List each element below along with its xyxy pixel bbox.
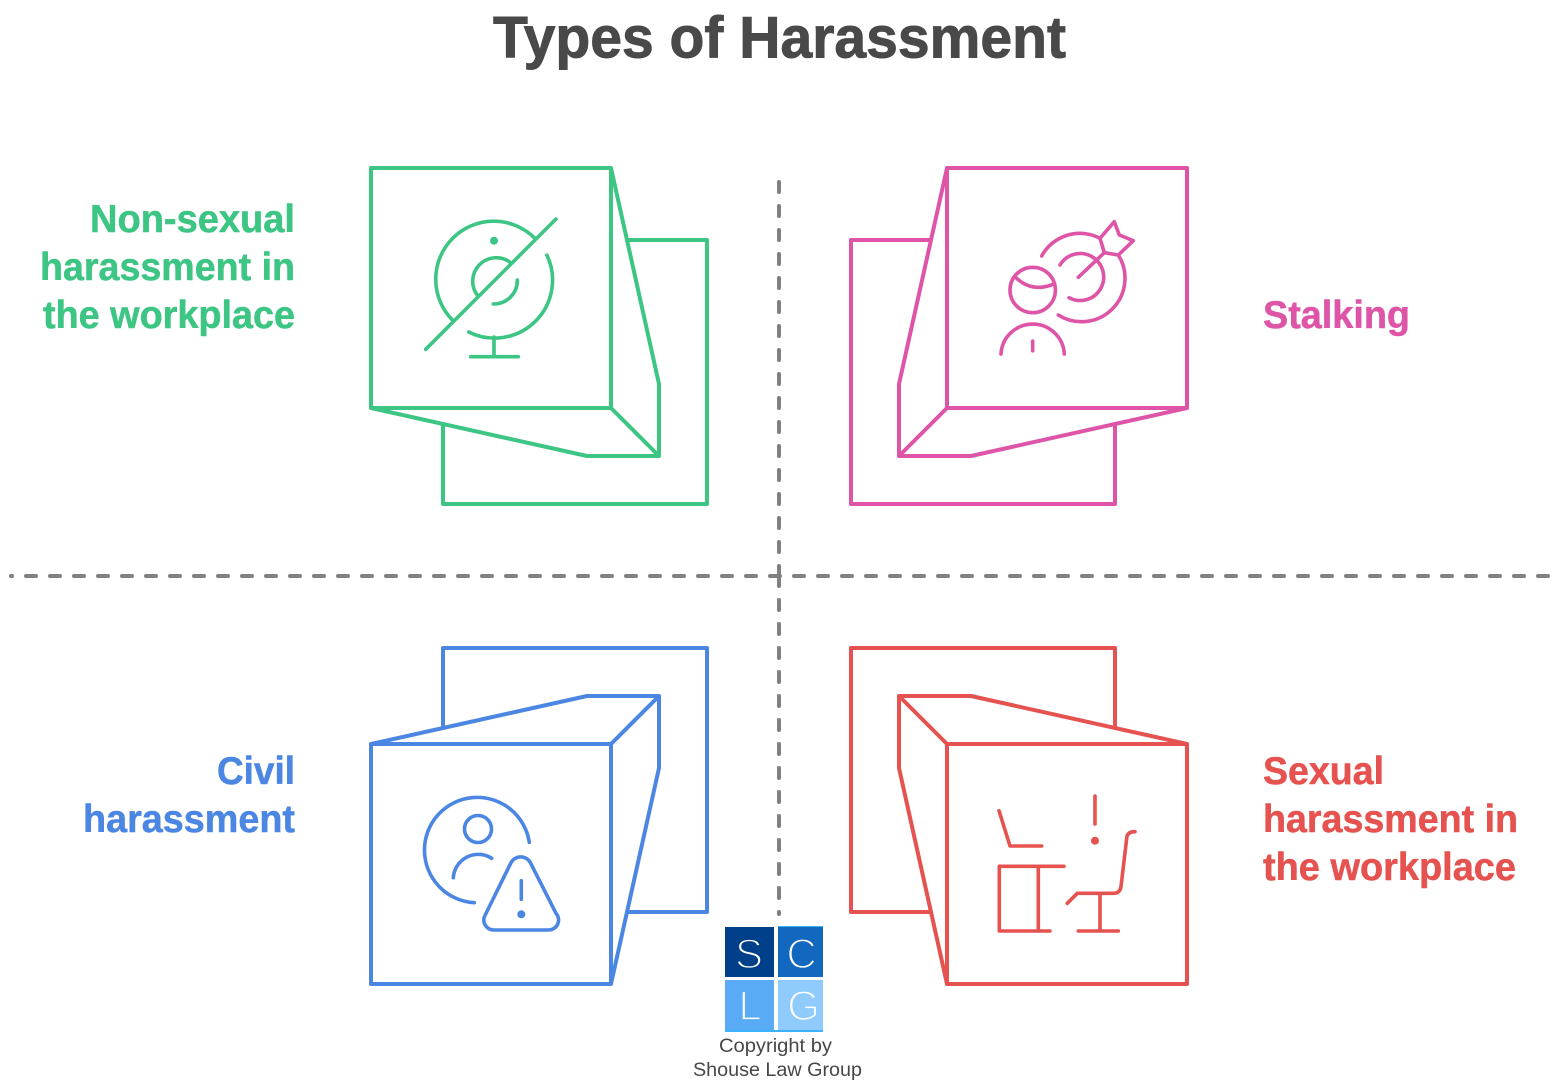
front cube — [371, 168, 659, 456]
logo: SCLG: L — [738, 982, 762, 1029]
label: non-sexual harassment in the workplace: the workplace — [43, 294, 295, 337]
logo: SCLG: G — [787, 982, 820, 1029]
copyright caption: Shouse Law Group — [693, 1059, 862, 1081]
back square — [443, 648, 707, 912]
panel: non-sexual harassment in the workplace — [371, 168, 707, 504]
label: sexual harassment in the workplace: harassment in — [1263, 798, 1518, 841]
title: Types of Harassment — [493, 6, 1066, 70]
front cube — [899, 696, 1187, 984]
back square — [443, 240, 707, 504]
label: stalking: Stalking — [1263, 294, 1410, 337]
logo: SCLG: C — [786, 930, 817, 977]
back square — [851, 240, 1115, 504]
logo: SCLG — [725, 926, 823, 1032]
label: non-sexual harassment in the workplace: harassment in — [40, 246, 295, 289]
icon: office desk and chair with alert — [999, 796, 1135, 931]
label: non-sexual harassment in the workplace — [40, 198, 295, 337]
logo: SCLG: S — [735, 930, 763, 977]
label: sexual harassment in the workplace — [1263, 750, 1518, 889]
vertical quadrant divider — [777, 182, 781, 914]
panel: stalking — [851, 168, 1187, 504]
panel: sexual harassment in the workplace — [851, 648, 1187, 984]
copyright caption — [693, 1035, 862, 1081]
label: civil harassment: harassment — [83, 798, 295, 841]
horizontal quadrant divider — [11, 574, 1550, 578]
panel: civil harassment — [371, 648, 707, 984]
label: sexual harassment in the workplace: Sexual — [1263, 750, 1384, 793]
label: sexual harassment in the workplace: the workplace — [1263, 846, 1516, 889]
icon: person targeted — [1001, 222, 1133, 354]
copyright caption: Copyright by — [719, 1035, 832, 1057]
back square — [851, 648, 1115, 912]
icon: person with warning triangle — [424, 797, 559, 930]
icon: webcam crossed out — [426, 219, 556, 357]
label: civil harassment — [83, 750, 295, 841]
label: non-sexual harassment in the workplace: Non-sexual — [90, 198, 295, 241]
front cube — [371, 696, 659, 984]
front cube — [899, 168, 1187, 456]
label: civil harassment: Civil — [217, 750, 295, 793]
